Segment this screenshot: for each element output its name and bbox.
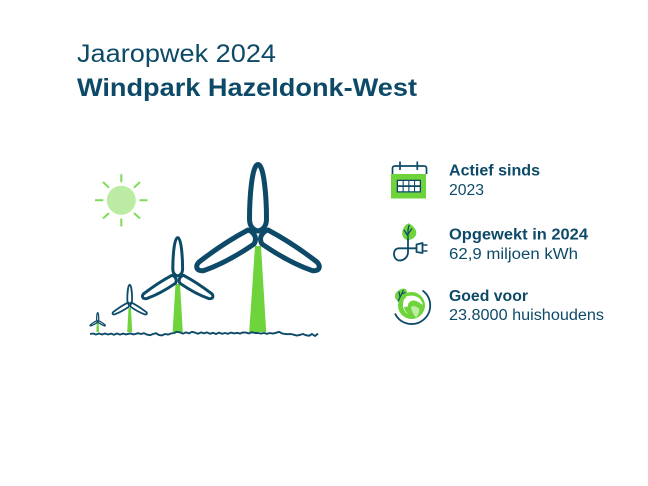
text: active since: Actief sinds [449,162,540,180]
turbine: small [113,285,147,332]
icon: calendar [391,162,426,198]
turbine: large [197,164,319,332]
text: active since: 2023 [449,182,484,199]
icon: sun [95,174,148,226]
text: generated in 2024: 62,9 miljoen kWh [449,246,578,263]
text: generated in 2024: Opgewekt in 2024 [449,226,588,244]
icon: globe with leaf [395,288,430,324]
text: good for households: 23.8000 huishoudens [449,307,604,324]
icon: plug with leaf [394,223,428,260]
text: active since [449,162,540,199]
text: good for households [449,288,604,324]
turbine: tiny [90,313,105,332]
ground line [90,332,318,336]
illustration: wind turbines [90,164,319,332]
text: good for households: Goed voor [449,288,528,305]
title: report year: Jaaropwek 2024 [77,40,276,68]
text: generated in 2024 [449,226,588,263]
title: wind farm name: Windpark Hazeldonk-West [77,74,418,102]
turbine: medium [142,238,213,332]
